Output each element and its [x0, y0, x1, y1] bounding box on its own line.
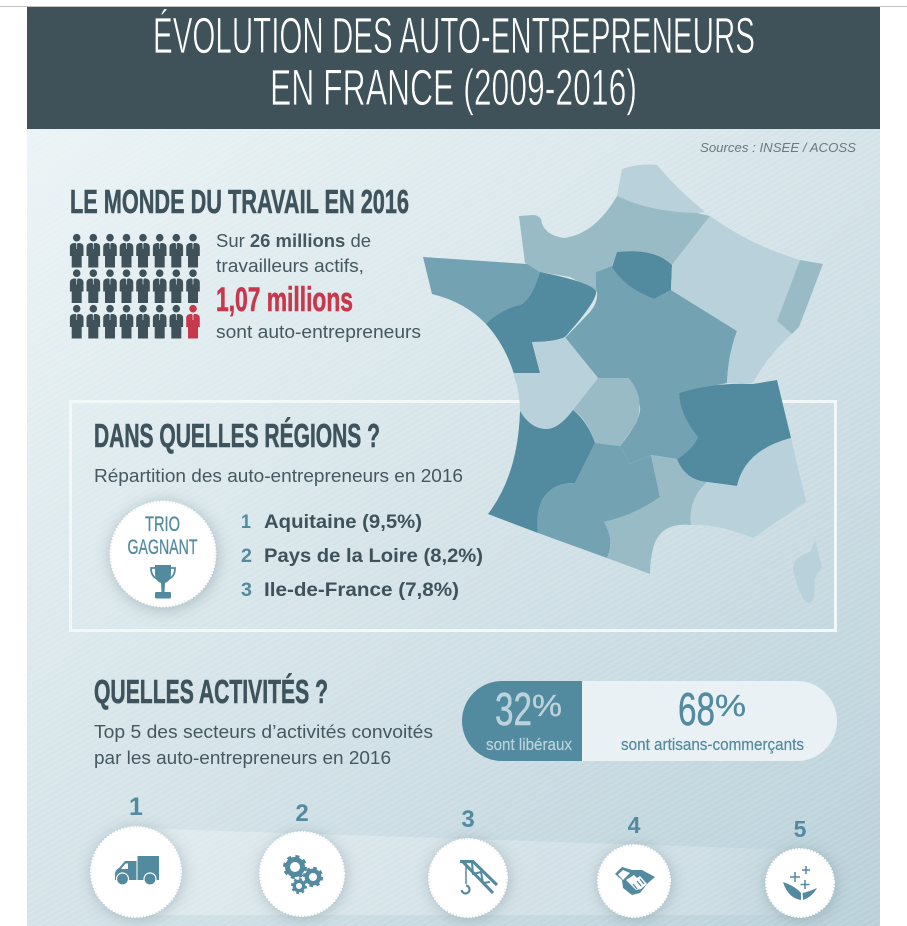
- header banner: EN FRANCE (2009-2016): [270, 59, 637, 116]
- ranking list: 1: [241, 512, 251, 533]
- region: Rhône-Alpes: [677, 380, 791, 486]
- top rule: [0, 6, 907, 7]
- subheading: par les auto-entrepreneurs en 2016: [94, 748, 391, 768]
- rank 3: crane: 3: [461, 806, 475, 833]
- icon: leaves and sparkles: [783, 866, 817, 900]
- subheading: Répartition des auto-entrepreneurs en 2016: [94, 466, 463, 486]
- section: régions: [94, 417, 483, 609]
- top 5 sectors: [92, 793, 835, 919]
- region: Limousin: [573, 378, 640, 446]
- badge: trio gagnant: TRIO: [145, 513, 180, 536]
- split pill: 32% / 68%: sont artisans-commerçants: [621, 735, 804, 754]
- split pill: 32% / 68%: %: [715, 688, 746, 723]
- region: Alsace: [777, 260, 823, 334]
- icon: handshake: [615, 867, 655, 895]
- split pill: 32% / 68%: 68: [678, 683, 715, 735]
- subheading: Top 5 des secteurs d’activités convoités: [94, 722, 433, 742]
- ranking list: 3: [241, 580, 252, 601]
- ranking list: Ile-de-France (7,8%): [264, 580, 459, 601]
- rank 2: gears: 2: [295, 800, 309, 827]
- split pill: 32% / 68%: 32: [495, 683, 532, 735]
- ranking list: Pays de la Loire (8,2%): [264, 546, 483, 567]
- rank 4: handshake: [598, 812, 671, 919]
- badge: trio gagnant: GAGNANT: [128, 536, 198, 559]
- split pill: 32% / 68%: sont libéraux: [486, 735, 572, 754]
- rank 2: gears: [260, 800, 345, 918]
- region: Poitou: [513, 337, 598, 429]
- badge: trio gagnant: [111, 502, 217, 609]
- region: Est: [671, 216, 800, 383]
- ranking list: Aquitaine (9,5%): [264, 512, 422, 533]
- icon: truck: [115, 856, 159, 885]
- heading: LE MONDE DU TRAVAIL EN 2016: [70, 183, 409, 220]
- rank 1: truck: 1: [129, 793, 143, 821]
- split pill: 32% / 68%: [462, 681, 837, 761]
- top 5 band: [136, 828, 800, 915]
- region: Pays de la Loire: [486, 272, 596, 374]
- ranking list: [241, 512, 483, 601]
- statement text: [216, 231, 421, 342]
- region: Bretagne: [423, 257, 540, 324]
- split pill: 32% / 68%: %: [532, 688, 562, 723]
- ranking list: 2: [241, 546, 252, 567]
- icon: gears: [284, 856, 322, 893]
- heading: QUELLES ACTIVITÉS ?: [94, 673, 328, 710]
- region: Midi-Pyrénées: [537, 443, 660, 558]
- rank 3: crane: [430, 806, 508, 919]
- region: Normandie and Picardie: [519, 196, 710, 292]
- rank 1: truck: [92, 793, 182, 919]
- icon: trophy: [151, 565, 175, 598]
- statement text: sont auto-entrepreneurs: [216, 322, 421, 342]
- map of France: [423, 164, 823, 603]
- region: Languedoc: [604, 455, 707, 574]
- header banner: [27, 7, 880, 129]
- rank 4: handshake: 4: [628, 812, 641, 838]
- rank 5: wellness: [766, 816, 835, 919]
- icon: crane: [460, 862, 497, 893]
- statement text: Sur 26 millions de: [216, 231, 371, 251]
- statement text: travailleurs actifs,: [216, 256, 364, 276]
- statement text: 1,07 millions: [216, 281, 353, 319]
- rank 5: wellness: 5: [794, 816, 807, 842]
- region: Corse: [793, 540, 822, 603]
- region: Nord: [617, 164, 705, 213]
- region: Aquitaine: [488, 410, 595, 533]
- subheading: [94, 722, 433, 768]
- section: activités: [94, 673, 837, 768]
- region: Ile-de-France: [612, 251, 672, 299]
- sources note: Sources : INSEE / ACOSS: [700, 141, 857, 155]
- region: PACA: [691, 438, 806, 538]
- people pictogram: [70, 234, 200, 338]
- region: Centre: [565, 266, 737, 464]
- section: le monde du travail: [70, 183, 421, 342]
- panel frame: regions: [70, 402, 836, 630]
- heading: DANS QUELLES RÉGIONS ?: [94, 417, 380, 454]
